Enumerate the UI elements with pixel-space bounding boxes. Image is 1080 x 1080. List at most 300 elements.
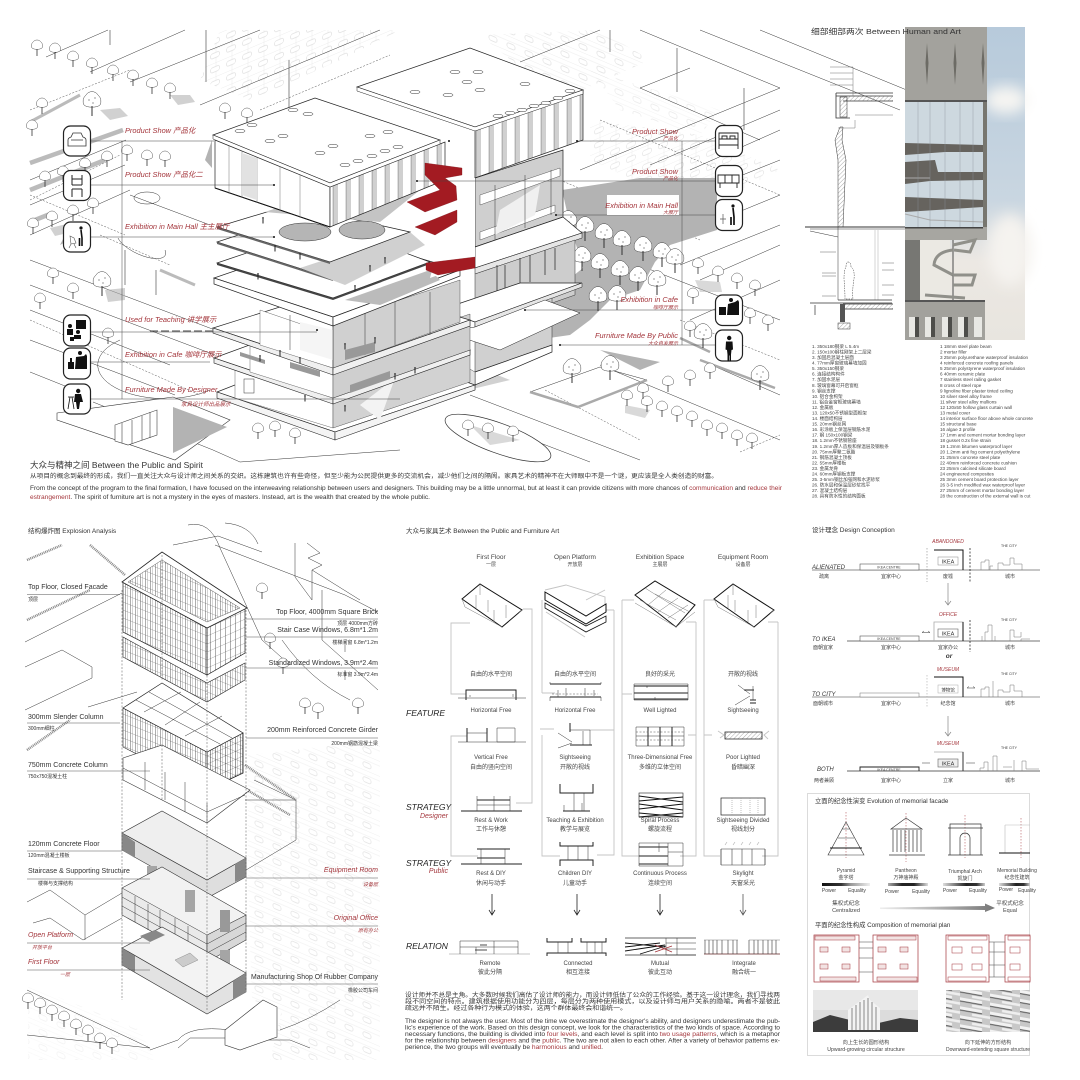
explosion labels, right: 橡胶公司车间 [348,987,378,994]
detail notes, english list: 7 stainless steel railing gasket [940,377,1002,382]
row: to city: TO CITY [812,692,837,698]
right annotation labels: Exhibition in Cafe [620,295,678,304]
facade captions and power scales: Memorial Building [997,868,1037,874]
right annotation labels: Exhibition in Main Hall [605,201,678,210]
detail notes, english list: 28 the construction of the external wall is cut [940,494,1031,499]
explosion labels, left: 750x750混凝土柱 [28,773,67,780]
relation captions: 融合统一 [732,968,756,976]
exploded layer: ground floor [122,927,246,1014]
row 1 captions: horizontal free: 多维的立体空间 [639,763,681,771]
text block: spirit paragraph, english: From the concept of the program to the final formation, I have focused on the interweaving relationship between users and designers. This building may be a little unnormal, but at least it can provide citizens with more chances of communication and reduce their [30,485,782,492]
photo captions: Upward-growing circular structure [827,1047,905,1053]
detail notes, chinese list: 8. 玻璃窗幕可开启窗框 [812,382,859,389]
detail notes, english list: 16 algae 3 profile [940,427,976,432]
facade captions and power scales: Equality [848,888,866,894]
detail notes, chinese list: 23. 金属龙骨 [812,465,838,472]
row 1 captions: horizontal free: Horizontal Free [470,708,512,714]
row 1 captions: horizontal free: 开敞的视线 [728,670,758,678]
detail notes, chinese list: 12. 金属板 [812,404,834,411]
row 2 captions: designer strategy: Children DIY [558,871,592,877]
text block: furniture art, english: perience, the two groups will eventually be harmonious and unified . [405,1045,603,1051]
text block: spirit paragraph, chinese: 从项目的概念到最终的形成，我们一直关注大众与设计师之间关系的交织。这栋建筑也许有些奇怪，但至少能为公民提供更多的交流机会，减少他们之间的隔阂。家具艺术的精神不在大师眼中不是一个谜，更应该是全人类创造的财富。 [30,472,718,480]
explosion labels, right [251,609,379,994]
detail notes, chinese list: 10. 铝合金构架 [812,393,843,400]
arrow: to city to both [945,716,951,736]
facade captions and power scales: Pantheon [895,868,917,874]
facade captions and power scales: Power [822,888,836,894]
detail notes, english list: 19 1.2mm bitumen waterproof layer [940,444,1013,449]
heading: explosion analysis: 结构爆炸图 Explosion Analysis [28,526,117,535]
relation captions [478,961,757,976]
facade captions and power scales: 集权式纪念 [832,899,860,907]
text block: spirit paragraph, english [30,485,782,501]
row 2 captions: designer strategy: 连续空间 [648,879,672,887]
photo: sky [905,27,1032,340]
explosion labels, right: 200mm Reinforced Concrete Girder [267,727,379,734]
strategy designer label: STRATEGY [406,802,453,812]
iso box: equipment room [714,584,774,627]
row 2 captions: designer strategy: Skylight [732,871,754,877]
exploded layer: top facade shell [122,552,247,702]
detail notes, chinese list: 5. 350x150钢梁 [812,365,844,372]
row: alienated: IKEA [942,560,955,566]
right annotation labels: 咖啡厅展示 [653,304,679,311]
strategy public label [406,858,453,875]
relation captions: Integrate [732,961,757,967]
column headers [476,554,768,568]
explosion labels, left: 顶层 [28,597,38,603]
diagrams: public strategy [461,842,765,866]
facade captions and power scales: Equality [1018,888,1036,894]
arrow: alienated to office [945,583,951,605]
row 1 captions: horizontal free: Three-Dimensional Free [628,755,693,761]
detail notes, chinese list: 19. 1.2mm厚人造板和保温层及钢板条 [812,443,889,450]
row 1 captions: horizontal free: 自由的水平空间 [554,670,596,678]
detail notes, english list: 15 structural base [940,422,977,427]
detail notes, english list: 14 interior surface floor above whole concrete [940,416,1033,421]
row 1 captions: horizontal free: Horizontal Free [554,708,596,714]
relation captions: 彼此互动 [648,968,672,976]
relation captions: Mutual [651,961,669,967]
callout backing: main hall label [607,195,679,215]
white circulation core [430,178,475,278]
left volume, lower floors [213,190,475,440]
detail notes, english list: 17 1mm and cement mortar bonding layer [940,433,1026,438]
detail notes, chinese list: 9. 钢丝支撑 [812,387,836,394]
diagrams: relation [449,938,780,956]
explosion labels, left: Top Floor, Closed Facade [28,584,108,591]
column headers: 设备层 [735,561,751,568]
row 2 captions: designer strategy: Teaching & Exhibition [546,818,604,824]
explosion labels, left: 120mm Concrete Floor [28,841,100,848]
detail notes, chinese list: 14. 楼面结构层 [812,415,843,422]
row: both: BOTH [817,767,834,773]
explosion labels, left: 楼梯与支撑结构 [38,880,73,887]
strategy public label: STRATEGY [406,858,453,868]
explosion labels, right: 楼梯间窗 6.8m*1.2m [332,639,378,646]
iso box: open platform [545,585,606,637]
power scale bars [822,883,1030,886]
panel: axonometric building between the public and spirit [26,30,980,471]
left annotation labels: Exhibition in Cafe 咖啡厅展示 [125,350,222,359]
detail notes, english list: 20 1.2mm anti fog cement polyethylene [940,449,1021,454]
row: both: MUSEUM [937,741,960,747]
row: both: 两者兼顾 [814,777,834,784]
row: to ikea: 面朝宜家 [813,644,833,651]
row 2 captions: designer strategy [474,818,770,887]
detail notes, chinese list: 17. 钢 150x100钢梁 [812,432,853,439]
icon: cafe seating [64,348,90,379]
facade captions and power scales: Triumphal Arch [948,869,982,875]
explosion labels, right: Equipment Room [324,867,378,874]
row label: feature: FEATURE [406,708,445,718]
row: alienated: 城市 [1005,573,1015,580]
row: alienated: 宜家中心 [881,573,901,580]
detail notes, chinese list: 22. 55mm厚楼板 [812,459,847,466]
facade captions and power scales: Equality [912,889,930,895]
row: to city: 面朝城市 [813,700,833,707]
icon: long sofa [716,166,742,196]
row: both: 城市 [1005,777,1015,784]
explosion labels, left: 120mm混凝土楼板 [28,852,70,859]
detail notes, english list: 25 3mm cement board protection layer [940,477,1019,482]
row: alienated: 废墟 [943,573,953,580]
explosion labels, right: 原有办公 [358,927,379,934]
explosion labels, left: Open Platform [28,932,73,939]
detail notes, english list: 13 metal cover [940,410,971,416]
facade captions and power scales: 金字塔 [838,874,854,881]
left annotation labels: Furniture Made By Designer [125,385,218,394]
right volume, lower floors [400,150,582,390]
explosion labels, left: 一层 [60,972,71,978]
detail notes, chinese list: 26. 防水层和保温层砂浆找平 [812,482,871,489]
row 2 captions: designer strategy: 天窗采光 [731,879,755,887]
icon: armchair [716,295,742,326]
row 2 captions: designer strategy: 儿童动手 [563,879,587,887]
photo: downward-extending square structure [946,990,1030,1032]
left annotation labels: Exhibition in Main Hall 主主展厅 [125,222,231,231]
explosion labels, right: Top Floor, 4000mm Square Brick [276,609,378,616]
row 2 captions: designer strategy: Rest & DIY [476,871,506,877]
text block: furniture art, english: The designer is not always the user. Most of the time we overestimate the designer's ability, and designers underestimate the pub- [405,1019,780,1025]
detail notes, english list: 8 cross of steel rope [940,383,982,388]
text block: furniture art, chinese: 疏远并不陌生。经过各种行为模式的体验，这两个群体最终会和谐统一。 [405,1004,627,1012]
relation captions: 彼此分隔 [478,968,502,976]
row 2 captions: designer strategy: 休闲与动手 [476,879,506,887]
detail notes, chinese list: 25. 3-5mm钢丝加强网和水泥砂浆 [812,476,880,483]
diagrams: feature row 1 [458,682,756,705]
heading: between human and art: 细部细部两次 Between Human and Art [811,26,962,36]
row: alienated: ABANDONED [931,539,964,545]
light poles [110,30,744,295]
text block: furniture art, chinese [405,991,780,1012]
facade captions and power scales: 平权式纪念 [996,899,1024,907]
row 2 captions: designer strategy: Rest & Work [474,818,509,824]
panel: design conception [811,525,1040,784]
explosion labels, left: 300mm Slender Column [28,714,104,721]
site trees [26,40,774,449]
left volume, roof with skylights [213,98,445,227]
row: to ikea: 城市 [1005,644,1015,651]
heading: between the public and spirit: 大众与精神之间 Between the Public and Spirit [30,460,204,470]
detail notes, chinese list: 2. 150x100钢柱刚架上二层梁 [812,348,872,356]
dashed alignment axes [122,555,246,1010]
relation label: RELATION [406,941,449,951]
detail notes, chinese list: 11. 铝合金窗框玻璃幕墙 [812,398,861,405]
heading: between the public and furniture art: 大众与家具艺术 Between the Public and Furniture Art [406,526,559,535]
relation captions: Connected [563,961,593,967]
facade diagrams [828,812,1030,862]
detail notes, english list: 4 reinforced concrete roofing panels [940,361,1014,366]
icon: figure with chair [64,222,90,252]
column headers: 主展层 [652,561,668,568]
site plan background: roads and parking [30,30,980,471]
row 2 captions: designer strategy: Continuous Process [633,871,687,877]
row: to city: 博物馆 [941,686,955,694]
row: to city: 纪念馆 [940,700,956,707]
photo: spiral stair and base [905,240,985,340]
detail notes, english list: 10 silver steel alloy frame [940,394,992,399]
row 2 captions: designer strategy: 工作与休憩 [476,825,506,833]
left annotation labels [125,126,231,408]
right annotation labels: Product Show [632,167,679,176]
detail notes, chinese list: 15. 20mm钢丝网 [812,421,847,428]
column headers: First Floor [476,554,506,561]
column bracket lines [451,600,778,856]
text block: furniture art, english [405,1019,781,1051]
detail notes, chinese list: 20. 75mm厚聚二氨酯 [812,448,856,455]
right volume, upper roof and columns [357,48,583,178]
detail notes, english list: 18 gusset 0.2x fine strain [940,438,992,443]
detail notes, chinese list [812,343,889,500]
detail notes, chinese list: 1. 350x180钢梁 L 5.4m [812,343,859,350]
detail notes, chinese list: 3. 加固后混凝土层面 [812,354,854,361]
icon: chair [64,170,90,200]
row: alienated: ALIENATED [811,565,846,571]
detail notes, english list: 27 25mm of cement mortar bonding layer [940,488,1024,493]
panel: between the public and furniture art [405,526,781,1051]
text block: furniture art, chinese: 设计师并不总是主角。大多数时候我们高估了设计师的能力，而设计师低估了公众的工作经验。基于这一设计理念，我们寻找两 [405,991,780,999]
facade captions and power scales: 凯旋门 [957,875,973,882]
detail notes, english list: 12 120x50 hollow glass curtain wall [940,405,1012,410]
detail notes, english list: 24 engineered composites [940,472,995,476]
row 2 captions: designer strategy: 视线划分 [731,825,755,833]
detail notes, english list: 5 25mm polystyrene waterproof insulation [940,366,1025,371]
detail notes, chinese list: 13. 120x50不锈钢型面框架 [812,410,867,416]
explosion labels, right: Standardized Windows, 3.9m*2.4m [269,660,378,667]
explosion labels, left: First Floor [28,959,60,966]
facade captions and power scales: Equality [969,888,987,894]
facade captions and power scales [822,868,1037,914]
photo captions [827,1038,1030,1053]
explosion labels, right: 标准窗 3.9m*2.4m [337,671,378,678]
row 1 captions: horizontal free: 自由的竖向空间 [470,763,512,771]
icon: bed [716,126,742,156]
facade captions and power scales: Pyramid [837,868,855,874]
row 1 captions: horizontal free: Well Lighted [644,708,676,714]
explosion labels, left: Staircase & Supporting Structure [28,868,130,875]
right annotation labels: 大展厅 [663,209,679,216]
site context lines and parking [22,523,380,1060]
row: to ikea: 宜家中心 [881,644,901,651]
row: both: IKEA CENTRE [877,768,901,772]
detail notes, chinese list: 28. 具有防水性的结构面板 [812,493,866,500]
row 1 captions: horizontal free: Sightseeing [559,755,591,761]
left annotation labels: Product Show 产品化二 [125,170,203,179]
text block: furniture art, english: lic's experience of the work. Based on this design concept, we look for the characteristics of the two kinds of space. According to [405,1026,781,1032]
row 1 captions: horizontal free: Poor Lighted [726,755,760,761]
text block: furniture art, english: for the relationship between designers and the public . The two are not alien to each other. After a variety of behavior patterns ex- [405,1038,780,1044]
text block: furniture art, chinese: 段不同空间的特点。建筑根据使用功能分为四层，每层分为两种使用模式，以及设计师与用户关系的隐喻。两者不是彼此 [405,998,780,1006]
row: both: IKEA [942,762,955,768]
detail notes, chinese list: 24. 60mm厚钢板支撑 [812,470,856,478]
wall section drawing [805,67,905,329]
text block: spirit paragraph, english: estrangement . The spirit of furniture art is not a mystery in the eyes of masters. Instead, art is the wealth that created by the whole public. [30,494,430,501]
left annotation labels: Product Show 产品化 [125,126,197,135]
row 2 captions: designer strategy: Sightseeing Divided [716,818,770,824]
row: both: 立家 [943,777,953,784]
row: to ikea: IKEA CENTRE [877,637,901,641]
detail notes, chinese list: 27. 混凝土结构层 [812,487,848,494]
row: alienated: THE CITY [1001,544,1018,548]
plan: right memorial [946,935,1030,982]
row: both [814,741,1040,784]
explosion labels, left: 开放平台 [32,944,53,951]
photo captions: Downward-extending square structure [946,1047,1030,1053]
detail notes, english list: 3 25mm polyurethane waterproof insulation [940,355,1029,360]
plan: left memorial [814,935,918,982]
iso box: exhibition space [635,581,695,627]
right annotation labels: 产品化 [663,175,679,182]
"or" divider: or [946,653,953,660]
strategy public label: Public [429,868,448,875]
right annotation labels: Product Show [632,127,679,136]
photo captions: 向上生长的圆形结构 [843,1038,889,1046]
row: alienated [811,539,1040,582]
row 1 captions: horizontal free: 开敞的视线 [560,763,590,771]
facade captions and power scales: Power [999,887,1013,893]
facade captions and power scales: 纪念性建筑 [1004,874,1030,881]
ground shadows [50,95,722,453]
text block: furniture art, english: necessary functions, the building is divided into four levels , and each level is split into two usage patterns , which is a metaphor [405,1032,780,1038]
facade captions and power scales: Power [885,889,899,895]
relation captions: Remote [479,961,501,967]
right annotation labels: 大众自发展示 [648,340,679,347]
explosion labels, left [28,584,130,978]
detail notes, english list: 22 40mm reinforced concrete cushion [940,460,1017,465]
strategy designer label: Designer [420,813,449,820]
explosion labels, right: 200mm钢筋混凝土梁 [331,740,378,747]
heading: composition of memorial plan: 平面的纪念性构成 Composition of memorial plan [815,920,951,929]
detail notes, english list: 6 40mm ceramic plate [940,372,986,377]
row: to city [812,667,1040,708]
heading: evolution of memorial facade: 立面的纪念性演变 Evolution of memorial facade [815,796,949,805]
row 1 captions: horizontal free: Sightseeing [727,708,759,714]
row 2 captions: designer strategy: Spiral Process [641,818,679,824]
row: alienated: 疏离 [819,573,829,580]
detail notes, chinese list: 7. 加固水泥层 [812,376,840,383]
parking lot box [225,1000,277,1050]
left annotation labels: Used for Teaching 讲学展示 [125,315,217,324]
row 2 captions: designer strategy: 螺旋流程 [648,825,672,833]
diagrams: designer strategy [461,784,765,817]
facade captions and power scales: Power [943,888,957,894]
relation captions: 相互连接 [566,968,590,976]
downward arrows [489,894,746,915]
icon: teaching [64,315,90,346]
panel: memorial facade and plan [808,794,1037,1056]
column headers: 开放层 [567,561,583,568]
column headers: Equipment Room [718,554,768,561]
detail notes, english list: 2 mortar filler [940,350,967,354]
detail notes, chinese list: 21. 钢筋混凝土顶板 [812,454,852,461]
row 1 captions: horizontal free [470,670,760,771]
row: to ikea: OFFICE [939,612,958,618]
right annotation labels [595,127,679,347]
column headers: Open Platform [554,554,596,561]
photo captions: 向下延伸的方形结构 [965,1038,1011,1046]
row 1 captions: horizontal free: 良好的采光 [645,670,675,678]
facade captions and power scales: Equal [1003,908,1017,914]
detail notes, english list: 1 18mm steel plate beam [940,344,992,349]
row: both: THE CITY [1001,746,1018,750]
icon: standing person [716,330,742,362]
explosion label lines [27,594,378,984]
exploded layer: columns and girders [123,683,250,823]
row: to ikea: TO IKEA [812,637,836,643]
leader lines, dots [91,141,715,399]
exploded layer: staircase core [147,866,230,952]
explosion labels, right: 设备层 [363,881,379,888]
right annotation labels: 产品化 [663,135,679,142]
panel: between human and art, facade detail [805,26,1033,500]
explosion labels, right: 顶层 4000mm方砖 [337,620,378,627]
row: alienated: IKEA CENTRE [877,566,901,570]
right annotation labels: Furniture Made By Public [595,331,678,340]
detail notes, english list: 21 25mm concrete steel plate [940,455,1001,460]
detail notes, chinese list: 16. 彩涂板上保温层钢筋水泥 [812,426,871,433]
red staircase ramps [407,163,475,275]
icon: sofa [64,126,90,156]
row 1 captions: horizontal free: 自由的水平空间 [470,670,512,678]
row: to ikea: 宜家办公 [938,644,958,651]
column headers: Exhibition Space [636,554,685,561]
row: to ikea: THE CITY [1001,618,1018,622]
row: to city: 宜家中心 [881,700,901,707]
row: to ikea [812,612,1040,652]
detail notes, chinese list: 4. 77mm厚窗玻璃幕墙加固 [812,360,867,367]
column headers: 一层 [486,562,496,568]
detail notes, english list: 23 25mm calcined silicate board [940,466,1006,471]
row: to city: MUSEUM [937,667,960,673]
iso box: first floor [462,584,522,627]
detail notes, chinese list: 18. 1.2mm不锈钢管座 [812,437,857,444]
photo: concrete block and glazing [905,27,987,240]
explosion labels, right: Manufacturing Shop Of Rubber Company [251,974,378,981]
heading: design conception: 设计理念 Design Conception [812,525,895,534]
facade captions and power scales: Centralized [832,908,860,914]
facade captions and power scales: 万神庙神殿 [893,874,919,881]
row 2 captions: designer strategy: 教学与展览 [560,825,590,833]
detail notes, english list: 11 silver steel alloy mullions [940,399,997,404]
explosion labels, left: 750mm Concrete Column [28,762,108,769]
panel: explosion analysis [22,523,380,1060]
exploded layer: concrete floor slab [122,811,246,898]
explosion labels, right: Stair Case Windows, 6.8m*1.2m [277,627,378,634]
row: to ikea: IKEA [942,632,955,638]
diagrams: feature row 2 [458,723,769,748]
row 1 captions: horizontal free: Vertical Free [474,755,508,761]
